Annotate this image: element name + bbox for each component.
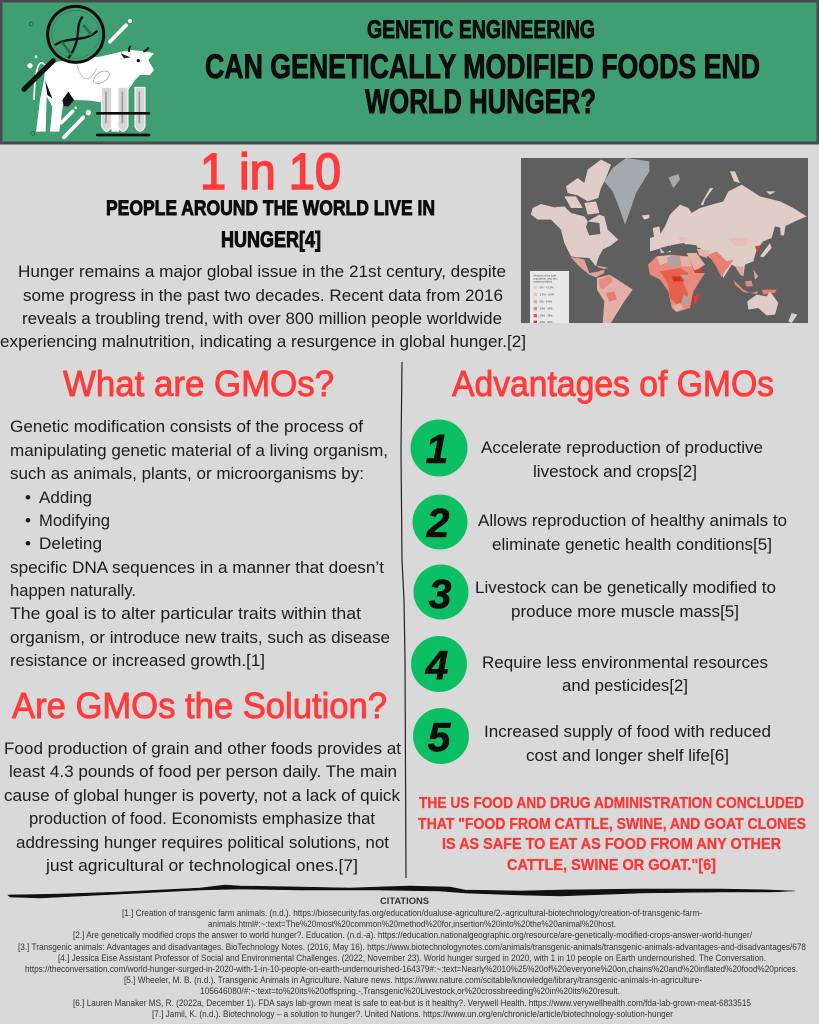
callout: FDA conclusion bbox=[418, 795, 806, 874]
brush stroke divider bbox=[8, 885, 795, 898]
text block: GMO definition: • bbox=[25, 488, 31, 507]
vertical divider bbox=[401, 362, 406, 878]
advantage 2: eliminate genetic health conditions[5] bbox=[492, 535, 772, 554]
text block: GMO definition: manipulating genetic material of a living organism, bbox=[10, 441, 388, 460]
advantage 4: Require less environmental resources bbox=[482, 653, 768, 672]
title: WORLD HUNGER? bbox=[365, 83, 596, 121]
advantage 5: 5 bbox=[428, 714, 452, 760]
callout: FDA conclusion: CATTLE, SWINE OR GOAT."[6] bbox=[507, 857, 716, 874]
advantage 1: Accelerate reproduction of productive bbox=[481, 438, 763, 457]
advantage 4 bbox=[411, 636, 768, 695]
text block: solution: cause of global hunger is poverty, not a lack of quick bbox=[4, 786, 401, 805]
heading: genetic engineering: GENETIC ENGINEERING bbox=[367, 16, 595, 44]
map legend: Percent of the total bbox=[534, 273, 556, 277]
text block: GMO definition: The goal is to alter particular traits within that bbox=[10, 604, 361, 623]
citation list bbox=[18, 908, 806, 1019]
text block: solution bbox=[4, 739, 401, 875]
map legend: population, who are bbox=[534, 276, 557, 280]
advantage 3: Livestock can be genetically modified to bbox=[475, 578, 776, 597]
statistic: 1 in 10: 1 in 10 bbox=[200, 143, 341, 200]
citation list: [4.] Jessica Eise Assistant Professor of Social and Environmental Challenges. (2022, November 23). World hunger surged in 2020, with 1 in 10 people on Earth undernourished. The Conversation. bbox=[58, 953, 766, 963]
header banner bbox=[1, 1, 818, 143]
advantage 1 bbox=[410, 420, 763, 481]
citations bbox=[18, 896, 806, 1019]
text block: GMO definition: Deleting bbox=[39, 534, 102, 553]
advantage 1: livestock and crops[2] bbox=[533, 462, 697, 481]
advantage 4: 4 bbox=[425, 642, 449, 688]
text block: solution: addressing hunger requires political solutions, not bbox=[16, 833, 389, 852]
text block: GMO definition: • bbox=[25, 511, 31, 530]
advantage 1: 1 bbox=[426, 426, 448, 472]
icon: cow under magnifying glass with DNA and test tubes bbox=[24, 6, 154, 137]
text block: solution: production of food. Economists emphasize that bbox=[29, 809, 375, 828]
citation list: [6.] Lauren Manaker MS, R. (2022a, December 1). FDA says lab-grown meat is safe to eat-but is it healthy?. Verywell Health. https://www.verywellhealth.com/fda-lab-grown-meat-6833515 bbox=[73, 998, 751, 1008]
text block: hunger intro bbox=[0, 262, 526, 351]
map legend bbox=[530, 271, 569, 324]
citation list: [5.] Wheeler, M. B. (n.d.). Transgenic Animals in Agriculture. Nature news. https://www.nature.com/scitable/knowledge/library/transgenic-animals-in-agriculture- bbox=[124, 975, 702, 985]
map legend: 0% - <2.5% bbox=[540, 286, 554, 290]
text block: solution: Food production of grain and other foods provides at bbox=[4, 739, 401, 758]
subheading: people living in hunger bbox=[106, 197, 435, 252]
advantage 5: cost and longer shelf life[6] bbox=[526, 746, 729, 765]
advantage 2: 2 bbox=[426, 500, 450, 546]
map: americas bbox=[531, 158, 671, 323]
text block: GMO definition: resistance or increased growth.[1] bbox=[10, 651, 265, 670]
callout: FDA conclusion: IS AS SAFE TO EAT AS FOOD FROM ANY OTHER bbox=[442, 836, 781, 853]
advantage 5: Increased supply of food with reduced bbox=[484, 722, 771, 741]
title bbox=[205, 48, 760, 121]
text block: GMO definition bbox=[10, 417, 390, 670]
subheading: people living in hunger: PEOPLE AROUND THE WORLD LIVE IN bbox=[106, 197, 435, 220]
text block: solution: least 4.3 pounds of food per person daily. The main bbox=[9, 762, 397, 781]
heading: are GMOs the solution: Are GMOs the Solution? bbox=[12, 685, 387, 726]
citation list: [7.] Jamil, K. (n.d.). Biotechnology – a solution to hunger?. United Nations. https://www.un.org/en/chronicle/article/biotechnology-solution-hunger bbox=[152, 1009, 673, 1019]
text block: hunger intro: experiencing malnutrition, indicating a resurgence in global hunger.[2] bbox=[0, 332, 526, 351]
advantage 2 bbox=[412, 494, 787, 554]
text block: hunger intro: some progress in the past two decades. Recent data from 2016 bbox=[23, 286, 503, 305]
advantage 3: 3 bbox=[429, 571, 452, 617]
map legend: undernourished bbox=[534, 279, 553, 283]
subheading: people living in hunger: HUNGER[4] bbox=[221, 227, 321, 252]
text block: GMO definition: Modifying bbox=[39, 511, 110, 530]
text block: GMO definition: such as animals, plants, or microorganisms by: bbox=[10, 464, 364, 483]
advantage 4: and pesticides[2] bbox=[562, 676, 688, 695]
advantage 2: Allows reproduction of healthy animals to bbox=[478, 511, 787, 530]
text block: GMO definition: happen naturally. bbox=[10, 581, 136, 600]
citation list: animals.html#:~:text=The%20most%20common%20method%20for,insertion%20into%20the%20animal%20host. bbox=[208, 919, 616, 929]
map: eurasia, africa, oceania bbox=[648, 171, 807, 323]
text block: GMO definition: Adding bbox=[39, 488, 92, 507]
map legend: 2.5% - 4.9% bbox=[540, 293, 555, 297]
citations heading: CITATIONS bbox=[380, 896, 429, 907]
world hunger map bbox=[521, 158, 808, 324]
text block: GMO definition: specific DNA sequences in a manner that doesn’t bbox=[10, 558, 384, 577]
text block: GMO definition: • bbox=[25, 534, 31, 553]
text block: GMO definition: organism, or introduce new traits, such as disease bbox=[10, 628, 390, 647]
advantage 5 bbox=[413, 708, 771, 765]
advantage 3 bbox=[414, 564, 776, 621]
citation list: 105646080/#:~:text=to%20its%20offspring.-,Transgenic%20Livestock,or%20crossbreeding%20in%20its%20result. bbox=[200, 986, 620, 996]
map legend: 40% - 60% bbox=[540, 320, 553, 324]
map legend: 25% - 39% bbox=[540, 314, 553, 318]
text block: hunger intro: Hunger remains a major global issue in the 21st century, despite bbox=[18, 262, 506, 281]
advantage 3: produce more muscle mass[5] bbox=[511, 602, 739, 621]
citation list: [2.] Are genetically modified crops the answer to world hunger?. Education. (n.d.-a). https://education.nationalgeographic.org/resource/are-genetically-modified-crops-answer-world-hunger/ bbox=[73, 930, 752, 940]
text block: GMO definition: Genetic modification consists of the process of bbox=[10, 417, 363, 436]
citation list: [1.] Creation of transgenic farm animals. (n.d.). https://biosecurity.fas.org/education/dualuse-agriculture/2.-agricultural-biotechnology/creation-of-transgenic-farm- bbox=[122, 908, 702, 918]
heading: advantages of GMOs: Advantages of GMOs bbox=[452, 363, 774, 404]
heading: what are GMOs: What are GMOs? bbox=[63, 363, 334, 404]
text block: hunger intro: reveals a troubling trend, with over 800 million people worldwide bbox=[22, 309, 502, 328]
map legend: 10% - 24% bbox=[540, 307, 553, 311]
text block: solution: just agricultural or technological ones.[7] bbox=[45, 856, 358, 875]
map legend: 5% - 9.9% bbox=[540, 300, 553, 304]
